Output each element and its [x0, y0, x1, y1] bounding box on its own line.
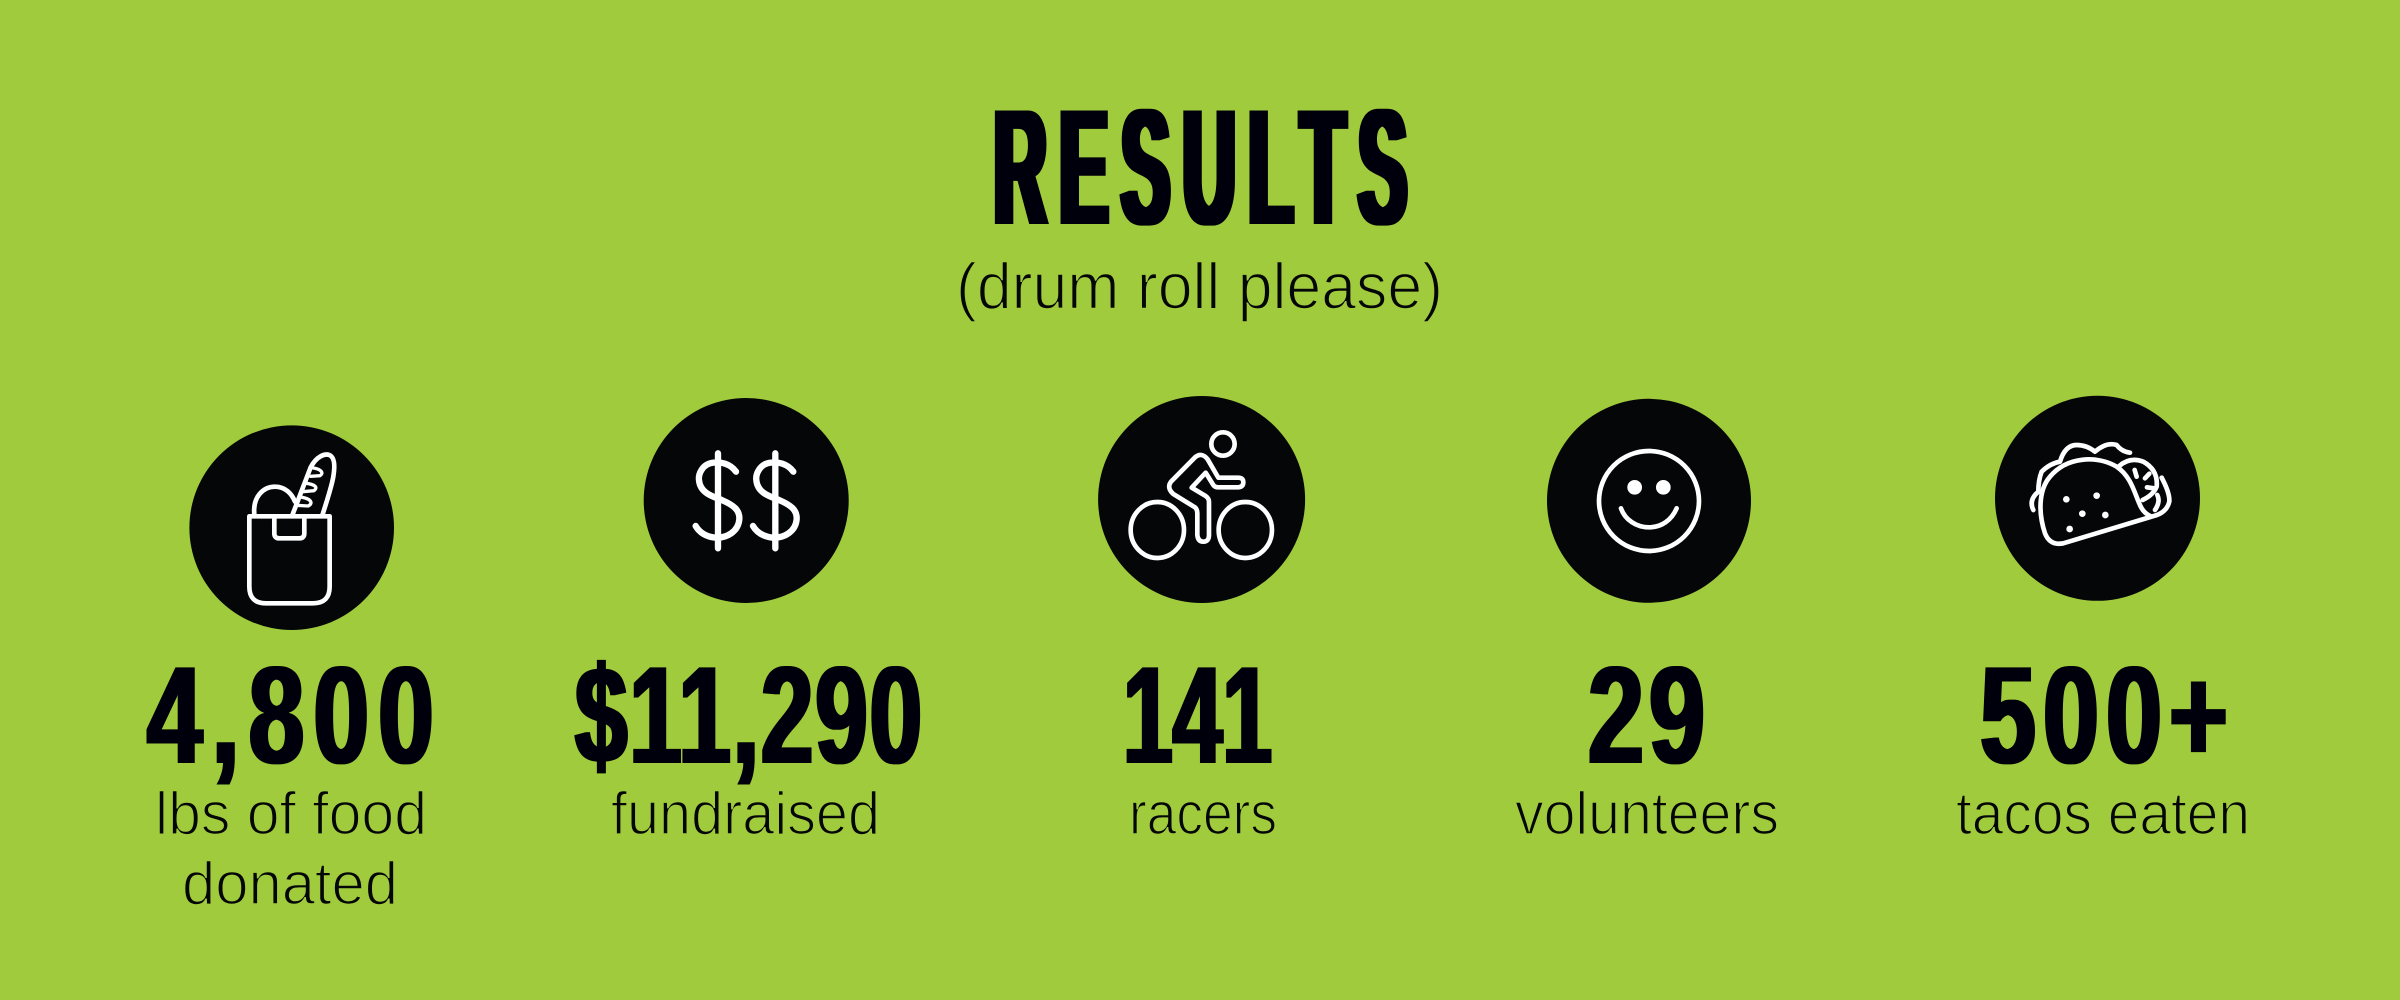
icon: dollar signs	[644, 398, 849, 603]
icon: grocery bag	[189, 425, 394, 630]
icon: taco	[1995, 396, 2200, 601]
label: donated	[182, 850, 398, 917]
label	[155, 780, 427, 917]
number: $11,290	[575, 638, 924, 793]
stat: racers	[1098, 396, 1305, 847]
label: racers	[1129, 780, 1277, 847]
number: 29	[1588, 638, 1710, 793]
number: 4,800	[147, 638, 443, 793]
label: tacos eaten	[1956, 780, 2250, 847]
number: 500+	[1980, 638, 2235, 793]
stat: fundraised	[575, 398, 924, 847]
label: fundraised	[611, 780, 880, 847]
stat: food donated	[147, 425, 443, 917]
stat: volunteers	[1515, 399, 1779, 847]
subtitle: (drum roll please)	[956, 250, 1443, 322]
label: volunteers	[1515, 780, 1779, 847]
label: lbs of food	[155, 780, 427, 847]
infographic canvas: RESULTS	[994, 75, 1420, 259]
icon: smiley face	[1547, 399, 1751, 603]
number: 141	[1123, 638, 1272, 793]
stat: tacos eaten	[1956, 396, 2250, 847]
icon: cyclist	[1098, 396, 1305, 603]
